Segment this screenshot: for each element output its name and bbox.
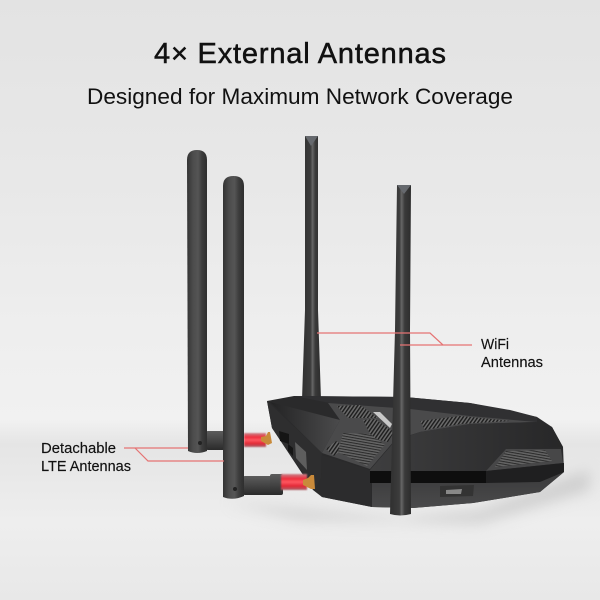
leader lines: LTE <box>124 448 224 461</box>
front panel <box>370 422 563 471</box>
front left panel <box>315 455 372 507</box>
right vent <box>486 449 563 471</box>
label: WiFi antennas <box>481 336 543 371</box>
top left facet <box>270 402 340 453</box>
label: LTE antennas <box>41 440 131 475</box>
hatched vents <box>337 405 378 418</box>
side ports <box>279 431 293 456</box>
antenna: LTE front <box>223 176 315 499</box>
lower front <box>372 472 564 508</box>
top hatched surface <box>322 403 536 469</box>
label: WiFi antennas: Antennas <box>481 354 543 371</box>
router <box>267 396 564 508</box>
logo highlight <box>373 412 392 428</box>
subtitle: Designed for Maximum Network Coverage <box>87 84 513 109</box>
USB port <box>440 485 474 497</box>
label: LTE antennas: LTE Antennas <box>41 458 131 475</box>
top lid <box>294 396 537 423</box>
LTE front gold tip <box>303 475 315 489</box>
label: WiFi antennas: WiFi <box>481 336 509 353</box>
LTE back connector <box>206 431 225 450</box>
leader lines: WiFi <box>317 333 472 345</box>
floor shadow <box>225 470 590 524</box>
LTE front connector <box>243 476 273 495</box>
LTE front red glow <box>281 474 307 490</box>
LTE back red glow <box>244 433 266 447</box>
antenna: LTE back <box>187 150 272 453</box>
title: 4× External Antennas <box>154 38 446 70</box>
black front band <box>370 471 486 483</box>
antenna: WiFi front <box>390 185 411 516</box>
side face <box>267 401 322 490</box>
label: LTE antennas: Detachable <box>41 440 116 457</box>
LTE back gold tip <box>261 432 272 445</box>
router silhouette <box>267 396 564 508</box>
label sticker <box>295 442 307 470</box>
antenna: WiFi back <box>302 136 321 400</box>
